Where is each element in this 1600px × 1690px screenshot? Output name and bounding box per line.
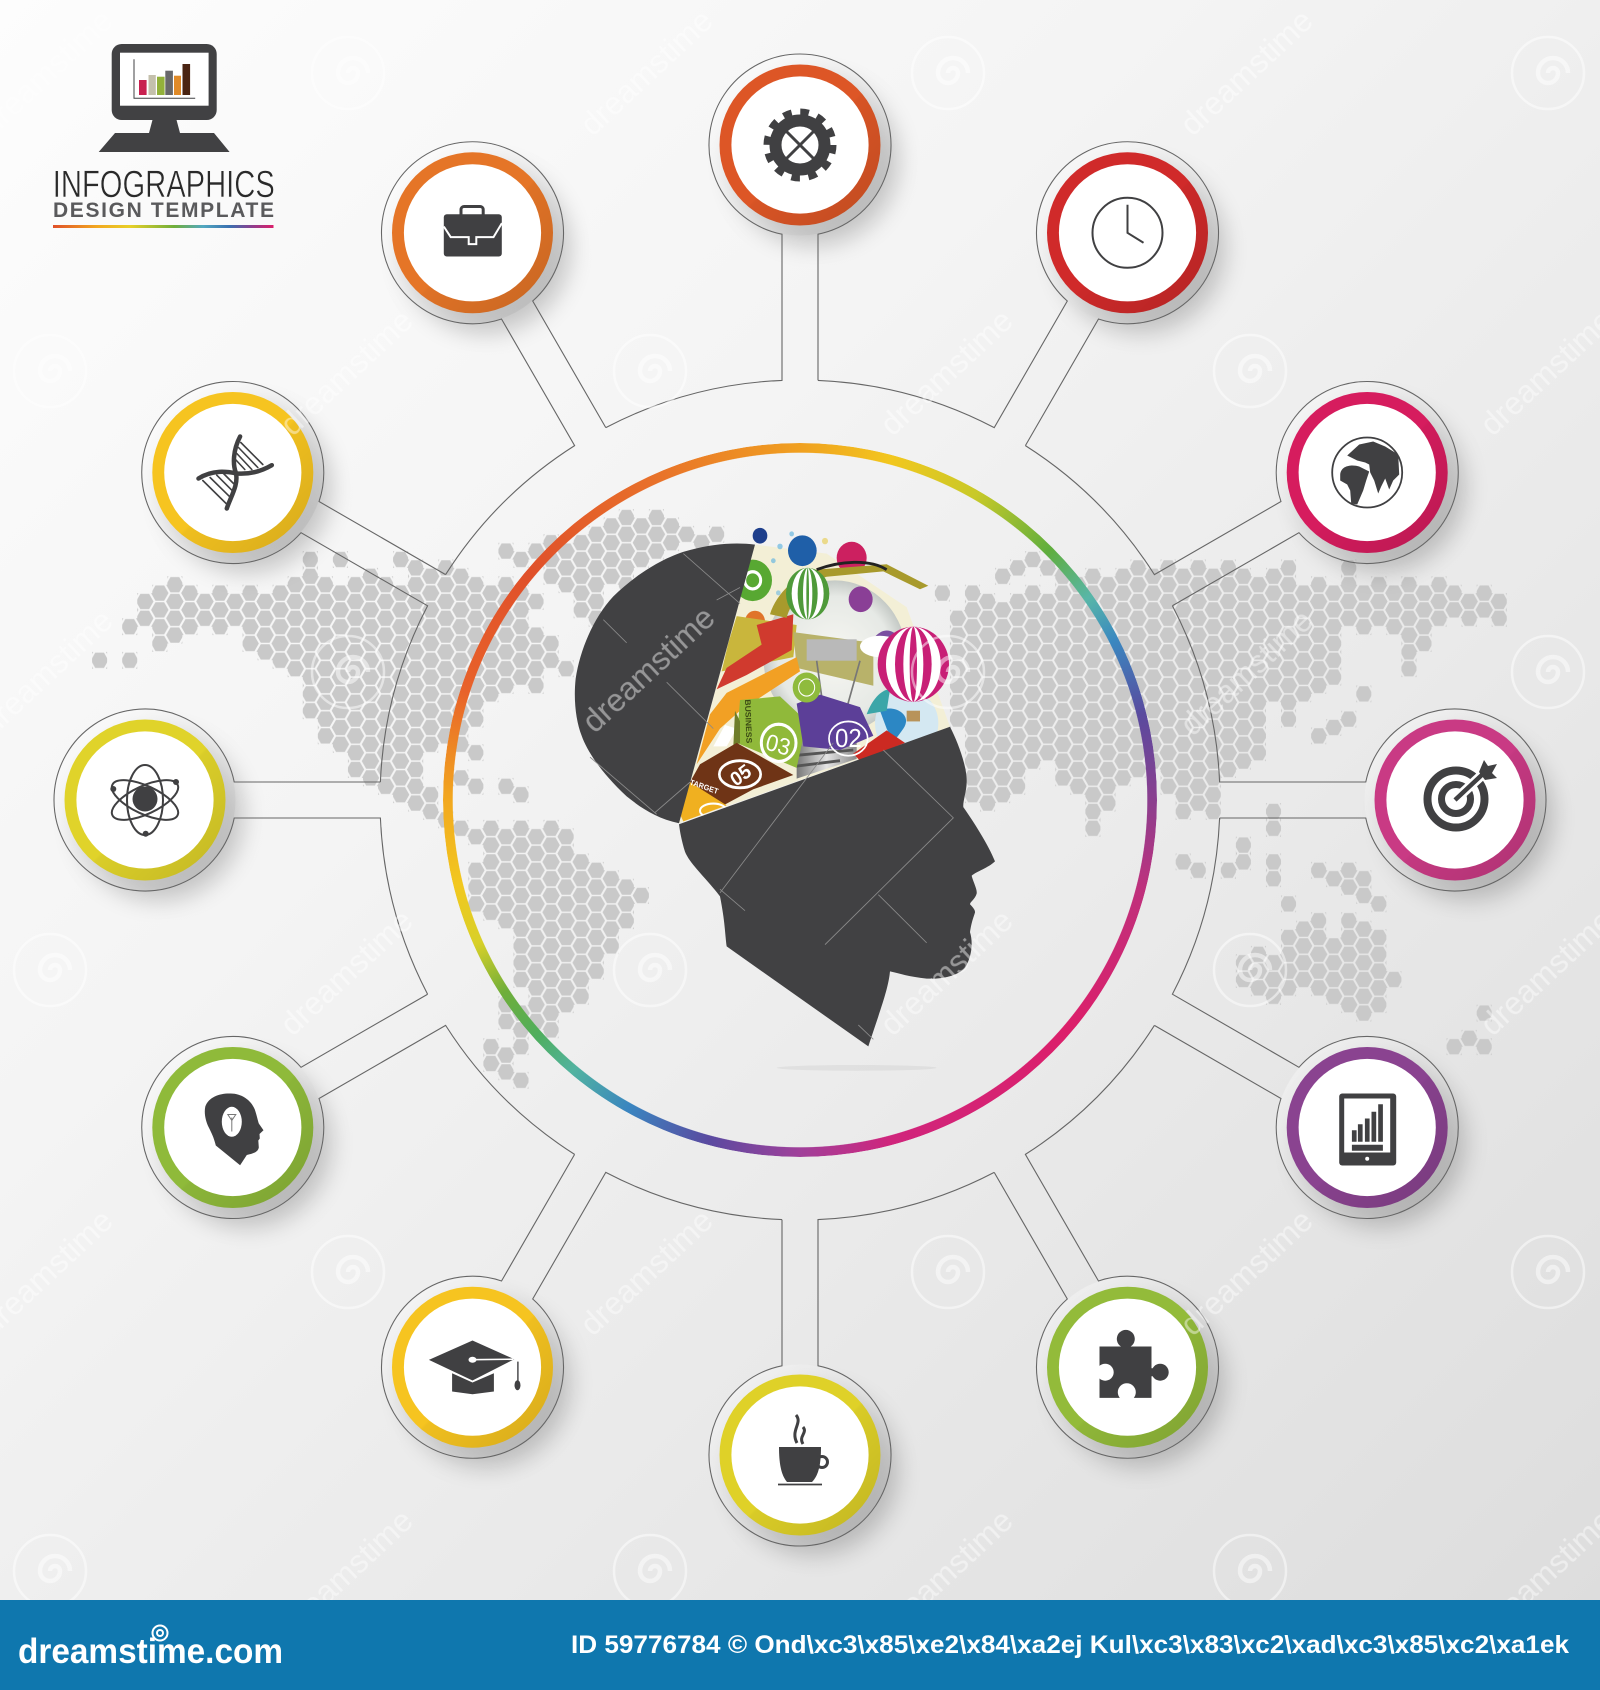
watermark text: dreamstime bbox=[873, 302, 1020, 442]
watermark text: dreamstime bbox=[573, 2, 720, 142]
icon: target with arrow bbox=[1428, 760, 1497, 828]
node: atom bbox=[54, 710, 236, 890]
watermark text: dreamstime bbox=[573, 1202, 720, 1342]
number badges: TARGET bbox=[689, 778, 720, 796]
footer logo: dreamstime.com: dreamstime.com bbox=[18, 1632, 283, 1671]
icon: head with lightbulb bbox=[205, 1093, 264, 1165]
watermark text: dreamstime bbox=[273, 1502, 420, 1642]
node: target bbox=[1364, 710, 1546, 890]
node: briefcase bbox=[382, 142, 563, 323]
number badges: 03 bbox=[763, 728, 793, 761]
watermark text: dreamstime bbox=[873, 902, 1020, 1042]
pink balloon bbox=[860, 627, 949, 721]
green balloon bbox=[786, 568, 829, 619]
node: coffee cup bbox=[710, 1364, 890, 1546]
icon: puzzle piece bbox=[1097, 1330, 1169, 1401]
footer image id and credit: ID 59776784 © Ond\xc3\x85\xe2\x84\xa2ej Kul\xc3\x83\xc2\xad\xc3\x85\xc2\xa1ek bbox=[571, 1631, 1569, 1659]
watermark text: dreamstime bbox=[1173, 602, 1320, 742]
number badges: 05 bbox=[726, 760, 756, 791]
logo: monitor with bar chart bbox=[99, 44, 230, 152]
head face and neck bbox=[679, 727, 995, 1046]
watermark text: dreamstime bbox=[273, 902, 420, 1042]
node: graduation cap bbox=[382, 1277, 563, 1458]
node: tablet chart bbox=[1277, 1037, 1458, 1218]
logo text: INFOGRAPHICS: INFOGRAPHICS bbox=[53, 164, 275, 206]
footer logo spiral bbox=[152, 1626, 168, 1640]
icon: graduation cap bbox=[429, 1340, 520, 1394]
world map of hexagons bbox=[92, 509, 1507, 1089]
brain contents: ideas bbox=[679, 528, 950, 823]
icon: dna helix bbox=[198, 436, 272, 508]
icon: coffee cup bbox=[778, 1415, 828, 1484]
node: head with lightbulb bbox=[142, 1037, 323, 1218]
head skull cap bbox=[575, 543, 755, 823]
footer bar bbox=[0, 1600, 1600, 1690]
logo rainbow underline bbox=[53, 225, 274, 228]
watermark text: dreamstime bbox=[873, 1502, 1020, 1642]
icon: atom bbox=[106, 765, 184, 837]
icon: briefcase bbox=[444, 206, 502, 256]
icon: clock bbox=[1092, 198, 1162, 268]
logo text: DESIGN TEMPLATE: DESIGN TEMPLATE bbox=[53, 199, 274, 222]
node: clock bbox=[1037, 142, 1218, 323]
node: globe bbox=[1277, 382, 1458, 563]
number badges: BUSINESS bbox=[743, 699, 754, 744]
number badges: 02 bbox=[835, 724, 862, 753]
icon: tablet chart bbox=[1339, 1094, 1396, 1166]
ground shadow under head bbox=[777, 1065, 937, 1071]
watermark text: dreamstime bbox=[575, 599, 722, 739]
node: dna helix bbox=[142, 382, 323, 563]
node: puzzle piece bbox=[1037, 1277, 1218, 1458]
central rainbow ring bbox=[443, 443, 1157, 1157]
central head illustration bbox=[575, 528, 995, 1071]
icon: globe bbox=[1332, 438, 1402, 508]
number badges bbox=[689, 699, 868, 818]
node: gear bbox=[710, 54, 890, 236]
watermark text: dreamstime bbox=[273, 302, 420, 442]
icon: gear bbox=[768, 112, 832, 178]
watermark text: dreamstime bbox=[1173, 1202, 1320, 1342]
watermark text: dreamstime bbox=[1173, 2, 1320, 142]
